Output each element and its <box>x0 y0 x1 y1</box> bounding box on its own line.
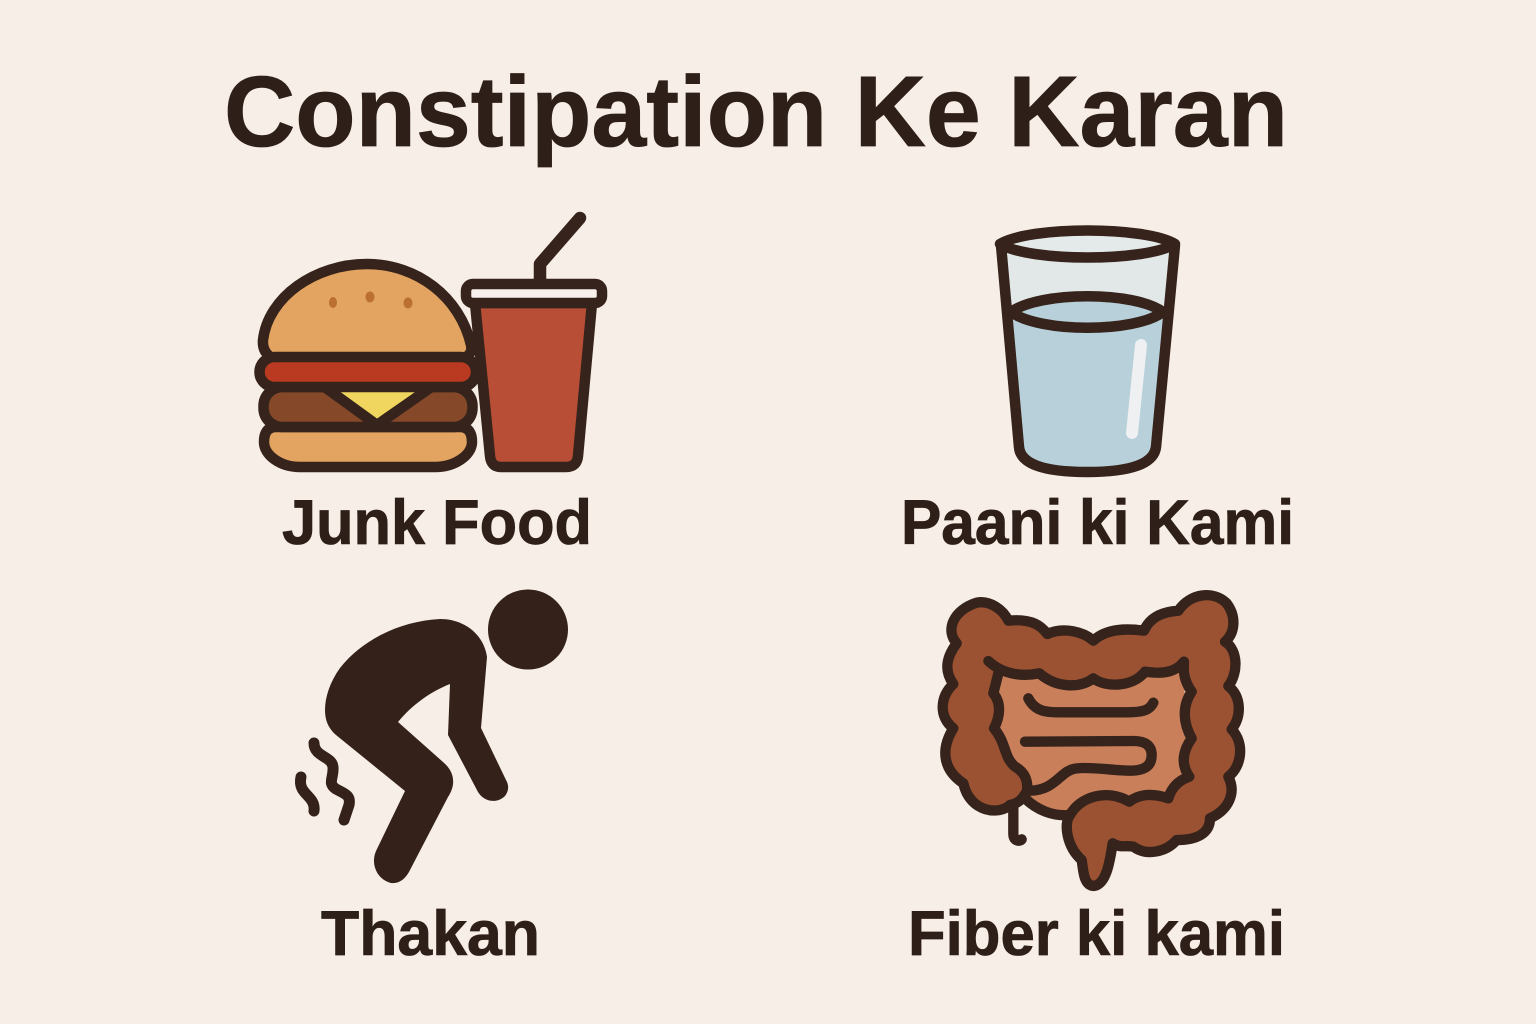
panel: fiber ki kami <box>908 595 1285 969</box>
icon: intestines <box>943 595 1240 886</box>
panel: paani ki kami <box>901 230 1294 558</box>
icon: fatigue squiggles <box>300 743 349 820</box>
icon: tired person <box>300 590 568 883</box>
panel: thakan <box>300 590 568 969</box>
icon: burger and drink <box>260 218 602 467</box>
title: Constipation Ke Karan <box>224 56 1288 168</box>
label: thakan: Thakan <box>321 899 540 969</box>
label: junk food: Junk Food <box>282 488 592 558</box>
panel: junk food <box>260 218 602 558</box>
icon: burger <box>260 264 476 467</box>
icon: glass of water <box>1000 230 1175 472</box>
icon: drink cup <box>466 218 602 467</box>
label: paani ki kami: Paani ki Kami <box>901 488 1294 558</box>
label: fiber ki kami: Fiber ki kami <box>908 899 1285 969</box>
